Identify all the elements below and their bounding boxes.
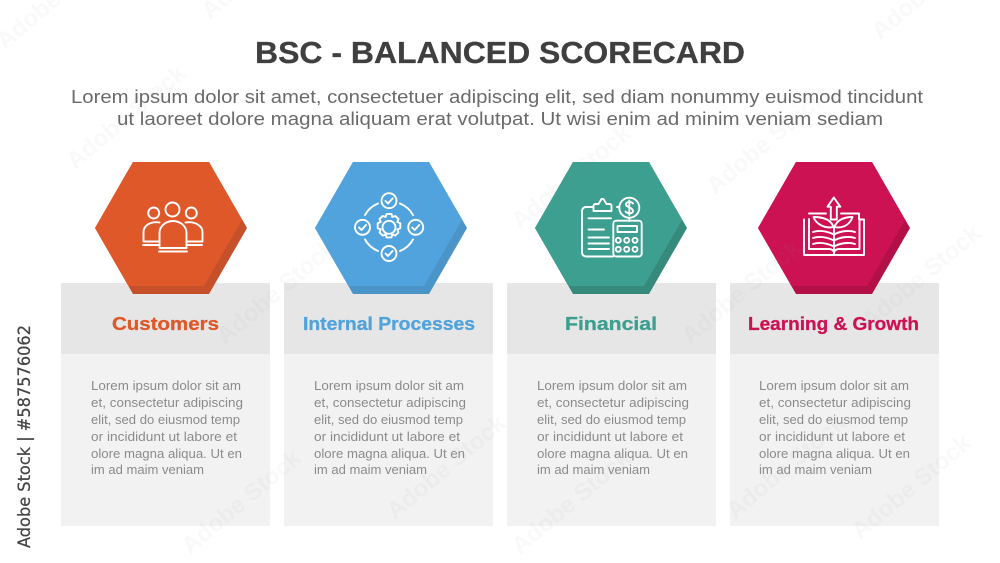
- card body: financial: [507, 354, 716, 526]
- text block: learning and growth: im ad maim veniam: [759, 463, 872, 477]
- text block: financial: or incididunt ut labore et: [537, 430, 684, 444]
- card header: customers: [61, 283, 270, 354]
- icon: people group: [143, 202, 202, 252]
- icon: gear with checks: [355, 193, 423, 261]
- panel: internal processes: [284, 162, 493, 526]
- text block: customers: im ad maim veniam: [91, 463, 204, 477]
- hexagon: financial: [535, 162, 687, 294]
- text block: learning and growth: [759, 379, 911, 477]
- watermark: Adobe Stock: [507, 119, 637, 235]
- heading: learning and growth: Learning & Growth: [748, 314, 919, 334]
- stock id side label: Adobe Stock | #587576062: [15, 325, 35, 548]
- hexagon: learning and growth: [758, 162, 910, 294]
- heading: internal processes: Internal Processes: [303, 314, 475, 334]
- card body: learning and growth: [730, 354, 939, 526]
- text block: learning and growth: olore magna aliqua. Ut en: [759, 447, 910, 461]
- text block: internal processes: im ad maim veniam: [314, 463, 427, 477]
- text block: financial: [537, 379, 689, 477]
- heading: customers: Customers: [112, 314, 219, 334]
- text block: learning and growth: Lorem ipsum dolor sit am: [759, 379, 909, 393]
- text block: customers: or incididunt ut labore et: [91, 430, 238, 444]
- watermark: Adobe Stock: [177, 444, 307, 560]
- heading: financial: Financial: [565, 314, 657, 334]
- title: BSC - BALANCED SCORECARD: [255, 35, 745, 70]
- text block: learning and growth: elit, sed do eiusmod temp: [759, 413, 908, 427]
- text block: internal processes: olore magna aliqua. Ut en: [314, 447, 465, 461]
- text block: internal processes: et, consectetur adipiscing: [314, 396, 466, 410]
- watermark: Adobe Stock: [507, 444, 637, 560]
- subtitle text: [71, 86, 923, 129]
- text block: internal processes: [314, 379, 466, 477]
- watermark: Adobe Stock: [382, 409, 512, 525]
- watermark: Adobe Stock: [857, 219, 987, 335]
- watermark: Adobe Stock: [702, 84, 832, 200]
- card header: internal processes: [284, 283, 493, 354]
- panel: learning and growth: [730, 162, 939, 526]
- text block: financial: im ad maim veniam: [537, 463, 650, 477]
- text block: financial: elit, sed do eiusmod temp: [537, 413, 686, 427]
- text block: learning and growth: et, consectetur adipiscing: [759, 396, 911, 410]
- watermark: Adobe Stock: [722, 409, 852, 525]
- watermark: Adobe Stock: [212, 234, 342, 350]
- text block: financial: Lorem ipsum dolor sit am: [537, 379, 687, 393]
- hexagon: internal processes: [315, 162, 467, 294]
- text block: customers: et, consectetur adipiscing: [91, 396, 243, 410]
- watermark: Adobe Stock: [847, 429, 977, 545]
- text block: customers: elit, sed do eiusmod temp: [91, 413, 240, 427]
- icon: clipboard, coin and calculator: [582, 198, 642, 256]
- text block: customers: Lorem ipsum dolor sit am: [91, 379, 241, 393]
- text block: learning and growth: or incididunt ut labore et: [759, 430, 906, 444]
- card header: financial: [507, 283, 716, 354]
- subtitle text: Lorem ipsum dolor sit amet, consectetuer adipiscing elit, sed diam nonummy euismod tincidunt: [71, 86, 923, 107]
- text block: internal processes: elit, sed do eiusmod temp: [314, 413, 463, 427]
- text block: financial: olore magna aliqua. Ut en: [537, 447, 688, 461]
- icon: open book with plant and arrow: [804, 198, 864, 255]
- card body: internal processes: [284, 354, 493, 526]
- text block: financial: et, consectetur adipiscing: [537, 396, 689, 410]
- text block: internal processes: Lorem ipsum dolor sit am: [314, 379, 464, 393]
- card header: learning and growth: [730, 283, 939, 354]
- subtitle text: ut laoreet dolore magna aliquam erat volutpat. Ut wisi enim ad minim veniam sediam: [117, 108, 883, 129]
- panel: customers: [61, 162, 270, 526]
- watermark: Adobe Stock: [62, 59, 192, 175]
- text block: customers: [91, 379, 243, 477]
- panel: financial: [507, 162, 716, 526]
- watermark: Adobe Stock: [677, 234, 807, 350]
- text block: internal processes: or incididunt ut labore et: [314, 430, 461, 444]
- hexagon: customers: [95, 162, 247, 294]
- card body: customers: [61, 354, 270, 526]
- text block: customers: olore magna aliqua. Ut en: [91, 447, 242, 461]
